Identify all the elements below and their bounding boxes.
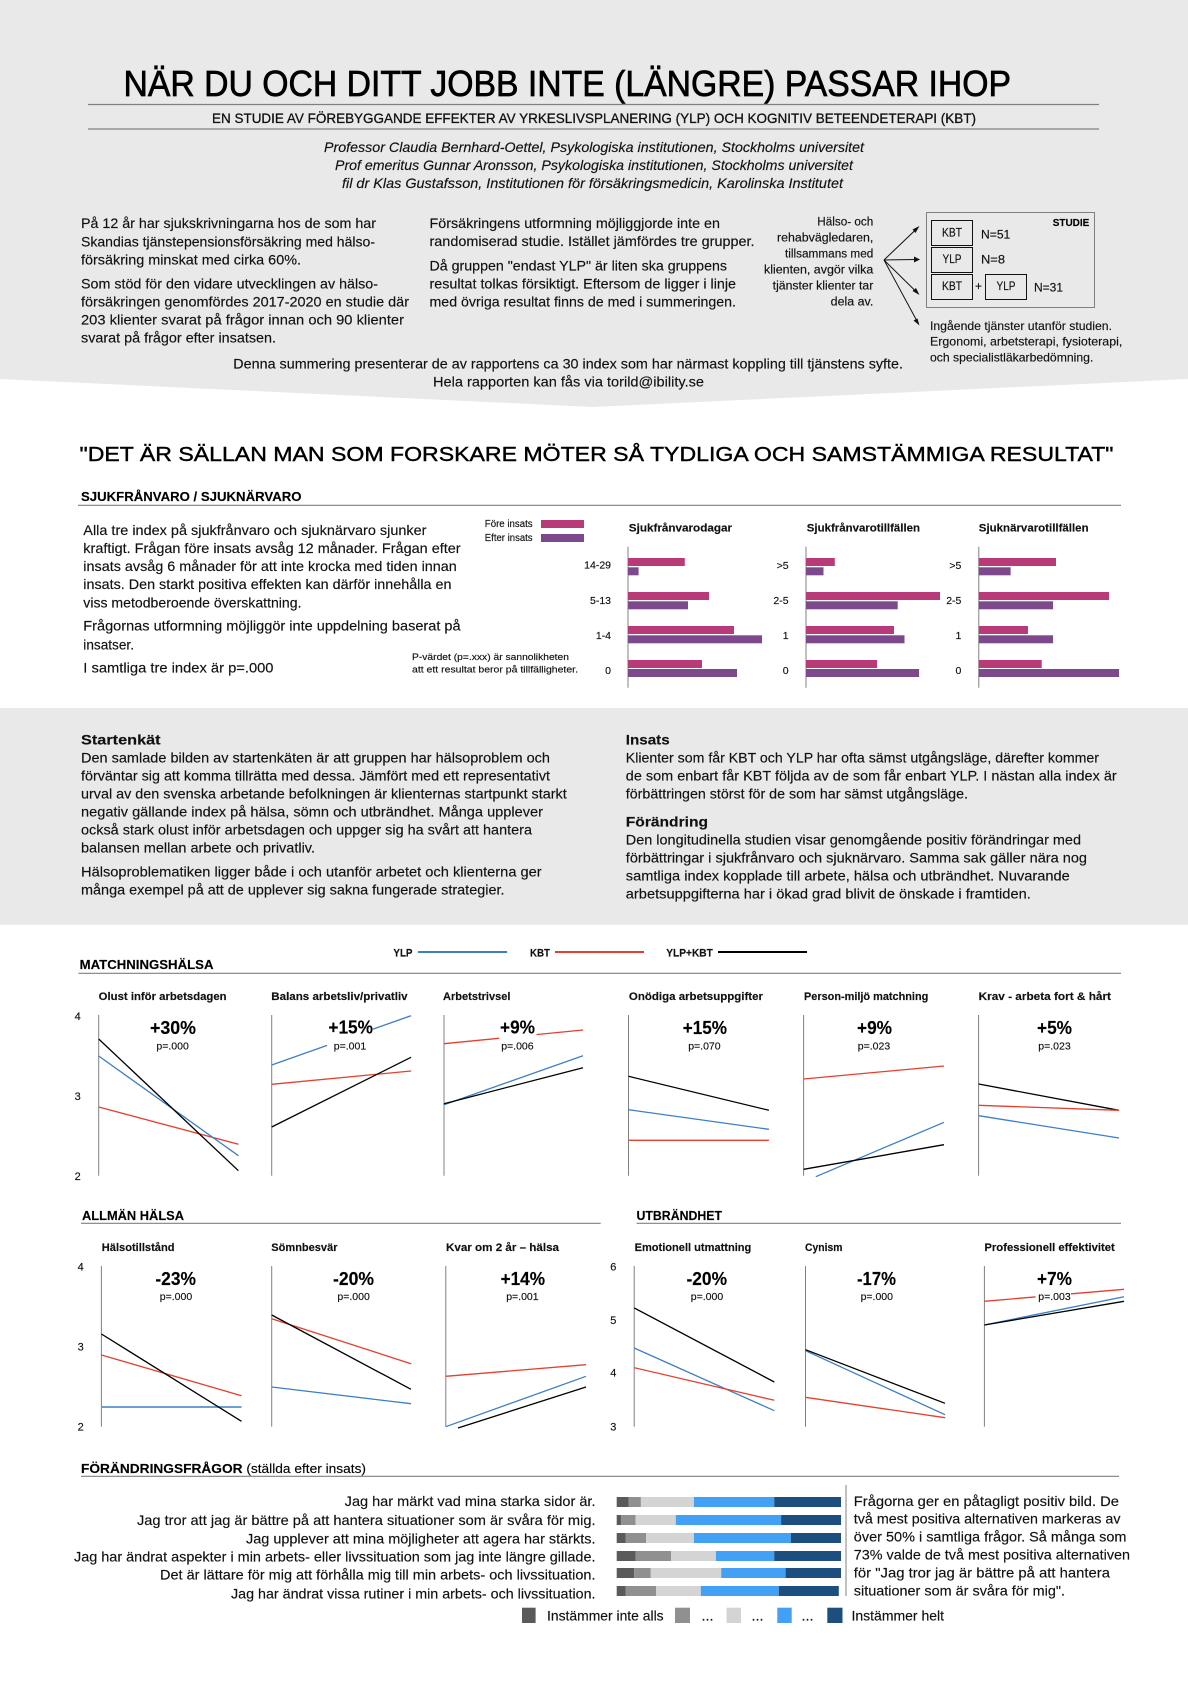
- authors: [324, 139, 865, 191]
- question labels: Det är lättare för mig att förhålla mig till min arbets- och livssituation.: [160, 1567, 596, 1583]
- bar chart: Sjukfrånvarotillfällen: 1: [783, 630, 789, 642]
- intro text column 2: randomiserad studie. Istället jämfördes tre grupper.: [430, 233, 754, 249]
- text: guide decides services: [764, 216, 874, 308]
- line chart: Olust inför arbetsdagen: p=.000: [156, 1040, 189, 1052]
- sick leave text block: Alla tre index på sjukfrånvaro och sjuknärvaro sjunker: [83, 522, 427, 538]
- bar chart: Sjukfrånvarodagar: 14-29: [584, 560, 611, 572]
- line chart: Olust inför arbetsdagen: [99, 991, 238, 1176]
- section heading: Förändringsfrågor: FÖRÄNDRINGSFRÅGOR (ställda efter insats): [81, 1461, 366, 1476]
- text block: Startenkät: Hälsoproblematiken ligger både i och utanför arbetet och klienterna ger: [81, 864, 542, 880]
- line chart: Balans arbetsliv/privatliv: Balans arbetsliv/privatliv: [271, 991, 409, 1003]
- stacked bar legend: Instämmer inte alls: [547, 1608, 664, 1624]
- bar chart: Sjuknärvarotillfällen: 1: [956, 630, 962, 642]
- sick leave text block: insatser.: [83, 636, 134, 652]
- sick leave text block: I samtliga tre index är p=.000: [83, 660, 274, 676]
- sick leave text block: viss metodberoende överskattning.: [83, 594, 302, 610]
- line chart: Arbetstrivsel: [443, 991, 583, 1176]
- question labels: Jag tror att jag är bättre på att hantera situationer som är svåra för mig.: [137, 1512, 596, 1528]
- line chart: Person-miljö matchning: p=.023: [858, 1040, 890, 1052]
- stacked bar legend: ...: [702, 1608, 714, 1624]
- bar chart: Sjuknärvarotillfällen: 0: [956, 665, 962, 677]
- sick leave text block: Frågornas utformning möjliggör inte uppdelning baserat på: [83, 618, 461, 634]
- question labels: [74, 1493, 596, 1602]
- text: services outside the study: och specialistläkarbedömning.: [930, 351, 1093, 365]
- study groups box: N=51: [981, 227, 1011, 241]
- quote heading: "DET ÄR SÄLLAN MAN SOM FORSKARE MÖTER SÅ TYDLIGA OCH SAMSTÄMMIGA RESULTAT": [80, 443, 1114, 466]
- legend: before / after: Efter insats: [485, 533, 533, 544]
- line chart: Hälsotillstånd: -23%: [155, 1269, 196, 1289]
- bar chart: Sjukfrånvarodagar: 0: [605, 665, 611, 677]
- bar chart: Sjukfrånvarotillfällen: 2-5: [773, 595, 789, 607]
- line chart: Professionell effektivitet: +7%: [1037, 1269, 1072, 1289]
- axis ticks general health: 2: [78, 1422, 84, 1434]
- p-value note: P-värdet (p=.xxx) är sannolikheten: [412, 652, 569, 663]
- line chart: Professionell effektivitet: [984, 1242, 1124, 1427]
- axis ticks burnout: 4: [610, 1368, 616, 1380]
- section heading: Allmän hälsa: ALLMÄN HÄLSA: [82, 1208, 185, 1223]
- study groups box: N=8: [981, 252, 1005, 266]
- bar chart: Sjukfrånvarodagar: 1-4: [596, 630, 611, 642]
- axis ticks burnout: [610, 1262, 616, 1434]
- text block: Förändring: förbättringar i sjukfrånvaro och sjuknärvaro. Samma sak gäller nära nog: [626, 849, 1087, 865]
- line chart: Olust inför arbetsdagen: Olust inför arbetsdagen: [99, 991, 227, 1003]
- text block: Startenkät: också stark olust inför arbetsdagen och uppger sig ha svårt att hantera: [81, 821, 532, 837]
- sick leave text block: kraftigt. Frågan före insats avsåg 12 månader. Frågan efter: [83, 540, 461, 556]
- intro text column 2: Då gruppen "endast YLP" är liten ska gruppens: [430, 258, 727, 274]
- section heading: Matchningshälsa: MATCHNINGSHÄLSA: [80, 957, 214, 972]
- legend: before / after: [485, 519, 584, 544]
- text block: Startenkät: [81, 731, 567, 898]
- axis ticks 2-4: 3: [75, 1091, 81, 1103]
- bar chart: Sjukfrånvarotillfällen: [773, 523, 940, 688]
- line legend: YLP+KBT: [666, 948, 713, 960]
- study groups box: STUDIE: [1053, 218, 1090, 229]
- text block: Startenkät: förväntar sig att komma tillrätta med dessa. Jämfört med ett representativt: [81, 767, 550, 783]
- line chart: Balans arbetsliv/privatliv: +15%: [328, 1017, 373, 1037]
- text block: Startenkät: negativ gällande index på hälsa, sömn och utbrändhet. Många upplever: [81, 803, 543, 819]
- sick leave text block: insats. Den starkt positiva effekten kan därför innehålla en: [83, 576, 452, 592]
- bar chart: Sjukfrånvarotillfällen: Sjukfrånvarotillfällen: [807, 523, 920, 535]
- commentary text: två mest positiva alternativen markeras av: [854, 1511, 1120, 1527]
- line chart: Onödiga arbetsuppgifter: +15%: [683, 1018, 727, 1038]
- line chart: Krav - arbeta fort & hårt: p=.023: [1038, 1040, 1071, 1052]
- question labels: Jag har märkt vad mina starka sidor är.: [345, 1493, 596, 1509]
- line chart: Onödiga arbetsuppgifter: [628, 991, 769, 1176]
- axis ticks general health: 4: [78, 1262, 84, 1274]
- bar chart: Sjukfrånvarotillfällen: 0: [783, 665, 789, 677]
- axis ticks general health: 3: [78, 1342, 84, 1354]
- bar chart: Sjuknärvarotillfällen: >5: [949, 560, 962, 572]
- line chart: Cynism: p=.000: [861, 1291, 893, 1303]
- findings background panel: [0, 708, 1188, 925]
- text: services outside the study: [930, 319, 1122, 365]
- line chart: Onödiga arbetsuppgifter: p=.070: [688, 1040, 721, 1052]
- axis ticks 2-4: 4: [75, 1011, 81, 1023]
- line chart: Sömnbesvär: Sömnbesvär: [271, 1242, 338, 1254]
- axis ticks 2-4: [75, 1011, 81, 1183]
- text: guide decides services: Hälso- och: [817, 216, 873, 228]
- line chart: Hälsotillstånd: Hälsotillstånd: [102, 1242, 174, 1254]
- summary note: Hela rapporten kan fås via torild@ibility.se: [433, 374, 704, 390]
- line chart: Emotionell utmattning: p=.000: [691, 1291, 723, 1303]
- bar chart: Sjukfrånvarodagar: [584, 523, 762, 688]
- line chart: Kvar om 2 år – hälsa: [446, 1242, 586, 1428]
- study groups box: YLP: [996, 279, 1016, 293]
- sick leave text block: [83, 522, 461, 676]
- line chart: Kvar om 2 år – hälsa: Kvar om 2 år – hälsa: [446, 1242, 560, 1254]
- line chart: Emotionell utmattning: Emotionell utmattning: [635, 1242, 751, 1254]
- arrows to study groups: [884, 226, 920, 326]
- authors: Professor Claudia Bernhard-Oettel, Psykologiska institutionen, Stockholms universitet: [324, 139, 865, 155]
- text block: Insats: förbättringen störst för de som har sämst utgångsläge.: [626, 785, 968, 801]
- study groups box: +: [975, 279, 982, 293]
- text block: Insats: Klienter som får KBT och YLP har ofta sämst utgångsläge, därefter kommer: [626, 749, 1099, 765]
- commentary text: [846, 1485, 1130, 1599]
- text block: Förändring: Förändring: [626, 814, 708, 830]
- text block: Startenkät: balansen mellan arbete och privatliv.: [81, 839, 315, 855]
- axis ticks general health: [78, 1262, 84, 1434]
- text block: Insats: Insats: [626, 731, 670, 747]
- bar chart: Sjuknärvarotillfällen: 2-5: [946, 595, 962, 607]
- stacked bar chart: change questions: [617, 1497, 841, 1596]
- header background panel: [0, 0, 1188, 407]
- bar chart: Sjukfrånvarodagar: Sjukfrånvarodagar: [629, 523, 733, 535]
- title: NÄR DU OCH DITT JOBB INTE (LÄNGRE) PASSAR IHOP: [124, 63, 1011, 104]
- line chart: Hälsotillstånd: p=.000: [160, 1291, 192, 1303]
- line chart: Person-miljö matchning: [804, 991, 944, 1177]
- question labels: Jag har ändrat aspekter i min arbets- eller livssituation som jag inte längre gillade.: [74, 1549, 596, 1565]
- commentary text: för "Jag tror jag är bättre på att hantera: [854, 1565, 1110, 1581]
- commentary text: situationer som är svåra för mig".: [854, 1583, 1065, 1599]
- text block: Startenkät: många exempel på att de upplever sig sakna fungerade strategier.: [81, 882, 505, 898]
- intro text column 1: svarat på frågor efter insatsen.: [81, 330, 276, 346]
- line chart: Balans arbetsliv/privatliv: p=.001: [334, 1040, 366, 1052]
- summary note: [233, 356, 903, 390]
- line chart: Arbetstrivsel: p=.006: [501, 1040, 534, 1052]
- line chart: Sömnbesvär: p=.000: [337, 1291, 370, 1303]
- line chart: Person-miljö matchning: +9%: [857, 1018, 892, 1038]
- text: services outside the study: Ingående tjänster utanför studien.: [930, 319, 1112, 333]
- section heading: sick leave: SJUKFRÅNVARO / SJUKNÄRVARO: [81, 489, 302, 504]
- axis ticks 2-4: 2: [75, 1171, 81, 1183]
- stacked bar legend: Instämmer helt: [852, 1608, 944, 1624]
- bar chart: Sjukfrånvarotillfällen: >5: [777, 560, 789, 572]
- line chart: Kvar om 2 år – hälsa: +14%: [501, 1269, 545, 1289]
- intro text column 2: [430, 215, 754, 310]
- intro text column 1: Skandias tjänstepensionsförsäkring med hälso-: [81, 234, 375, 250]
- line chart: Olust inför arbetsdagen: +30%: [150, 1018, 196, 1038]
- study groups box: N=31: [1034, 281, 1063, 295]
- line chart: Cynism: [805, 1242, 945, 1427]
- line chart: Kvar om 2 år – hälsa: p=.001: [506, 1291, 539, 1303]
- text block: Förändring: samtliga index kopplade till arbete, hälsa och utbrändhet. Nuvarande: [626, 867, 1070, 883]
- line chart: Krav - arbeta fort & hårt: [979, 991, 1119, 1176]
- text: guide decides services: klienten, avgör vilka: [764, 264, 874, 276]
- study groups box: YLP: [942, 252, 962, 266]
- intro text column 1: Som stöd för den vidare utvecklingen av hälso-: [81, 276, 378, 292]
- line chart: Emotionell utmattning: -20%: [686, 1269, 727, 1289]
- text block: Startenkät: urval av den svenska arbetande befolkningen är klienternas startpunkt starkt: [81, 785, 567, 801]
- p-value note: att ett resultat beror på tillfälligheter.: [412, 664, 578, 675]
- text block: Startenkät: Startenkät: [81, 731, 161, 747]
- intro text column 2: med övriga resultat finns de med i summeringen.: [430, 294, 736, 310]
- section heading: Utbrändhet: UTBRÄNDHET: [636, 1208, 722, 1223]
- line chart: Balans arbetsliv/privatliv: [271, 991, 411, 1176]
- subtitle: EN STUDIE AV FÖREBYGGANDE EFFEKTER AV YRKESLIVSPLANERING (YLP) OCH KOGNITIV BETEENDETERAPI (KBT): [212, 109, 976, 126]
- text block: Förändring: Den longitudinella studien visar genomgående positiv förändringar med: [626, 831, 1081, 847]
- p-value note: [412, 652, 578, 675]
- line chart: Professionell effektivitet: p=.003: [1038, 1291, 1071, 1303]
- stacked bar legend: ...: [802, 1608, 814, 1624]
- question labels: Jag upplever att mina möjligheter att agera har stärkts.: [246, 1530, 596, 1546]
- line chart: Krav - arbeta fort & hårt: +5%: [1037, 1018, 1072, 1038]
- text: guide decides services: dela av.: [831, 296, 873, 308]
- commentary text: Frågorna ger en påtagligt positiv bild. De: [854, 1493, 1119, 1509]
- commentary text: 73% valde de två mest positiva alternativen: [854, 1547, 1130, 1563]
- line chart: Sömnbesvär: -20%: [333, 1269, 374, 1289]
- intro text column 1: På 12 år har sjukskrivningarna hos de som har: [81, 215, 376, 231]
- line legend: KBT: [530, 948, 550, 960]
- line legend: [393, 948, 807, 960]
- stacked bar legend: ...: [752, 1608, 764, 1624]
- intro text column 1: försäkringen genomfördes 2017-2020 en studie där: [81, 294, 409, 310]
- intro text column 1: försäkring minskat med cirka 60%.: [81, 252, 301, 268]
- line chart: Person-miljö matchning: Person-miljö matchning: [804, 991, 928, 1003]
- bar chart: Sjukfrånvarodagar: 5-13: [590, 595, 611, 607]
- study groups box: [926, 212, 1094, 308]
- text: guide decides services: tillsammans med: [785, 248, 873, 260]
- text block: Insats: [626, 731, 1117, 801]
- text block: Förändring: [626, 814, 1087, 901]
- line chart: Cynism: Cynism: [805, 1242, 843, 1254]
- authors: fil dr Klas Gustafsson, Institutionen för försäkringsmedicin, Karolinska Institutet: [342, 175, 844, 191]
- text: guide decides services: rehabvägledaren,: [777, 232, 873, 244]
- line chart: Arbetstrivsel: +9%: [500, 1018, 535, 1038]
- text: services outside the study: Ergonomi, arbetsterapi, fysioterapi,: [930, 335, 1122, 349]
- line chart: Onödiga arbetsuppgifter: Onödiga arbetsuppgifter: [629, 991, 764, 1003]
- line chart: Hälsotillstånd: [101, 1242, 242, 1427]
- intro text column 1: 203 klienter svarat på frågor innan och 90 klienter: [81, 312, 404, 328]
- intro text column 2: resultat tolkas försiktigt. Eftersom de ligger i linje: [430, 276, 736, 292]
- bar chart: Sjuknärvarotillfällen: Sjuknärvarotillfällen: [979, 523, 1089, 535]
- intro text column 1: [81, 215, 409, 346]
- sick leave text block: insats avsåg 6 månader för att inte krocka med tiden innan: [83, 558, 457, 574]
- commentary text: över 50% i samtliga frågor. Så många som: [854, 1529, 1126, 1545]
- text block: Insats: de som enbart får KBT följda av de som får enbart YLP. I nästan alla index är: [626, 767, 1117, 783]
- axis ticks burnout: 5: [610, 1315, 616, 1327]
- line chart: Arbetstrivsel: Arbetstrivsel: [443, 991, 510, 1003]
- line chart: Sömnbesvär: [271, 1242, 411, 1427]
- summary note: Denna summering presenterar de av rapportens ca 30 index som har närmast koppling till tjänstens syfte.: [233, 356, 903, 372]
- legend: before / after: Före insats: [485, 519, 533, 530]
- line chart: Professionell effektivitet: Professionell effektivitet: [984, 1242, 1115, 1254]
- question labels: Jag har ändrat vissa rutiner i min arbets- och livssituation.: [231, 1586, 596, 1602]
- line chart: Cynism: -17%: [857, 1269, 896, 1289]
- line legend: YLP: [393, 948, 412, 960]
- axis ticks burnout: 6: [610, 1262, 616, 1274]
- line chart: Emotionell utmattning: [634, 1242, 774, 1427]
- study groups box: KBT: [942, 279, 963, 293]
- study groups box: KBT: [942, 226, 963, 240]
- text: guide decides services: tjänster klienter tar: [773, 280, 873, 292]
- authors: Prof emeritus Gunnar Aronsson, Psykologiska institutionen, Stockholms universitet: [335, 157, 854, 173]
- text block: Startenkät: Den samlade bilden av startenkäten är att gruppen har hälsoproblem och: [81, 749, 550, 765]
- intro text column 2: Försäkringens utformning möjliggjorde inte en: [430, 215, 720, 231]
- axis ticks burnout: 3: [610, 1422, 616, 1434]
- text block: Förändring: arbetsuppgifterna har i ökad grad blivit de önskade i framtiden.: [626, 885, 1031, 901]
- line chart: Krav - arbeta fort & hårt: Krav - arbeta fort & hårt: [979, 991, 1111, 1003]
- bar chart: Sjuknärvarotillfällen: [946, 523, 1119, 688]
- stacked bar legend: [522, 1608, 944, 1624]
